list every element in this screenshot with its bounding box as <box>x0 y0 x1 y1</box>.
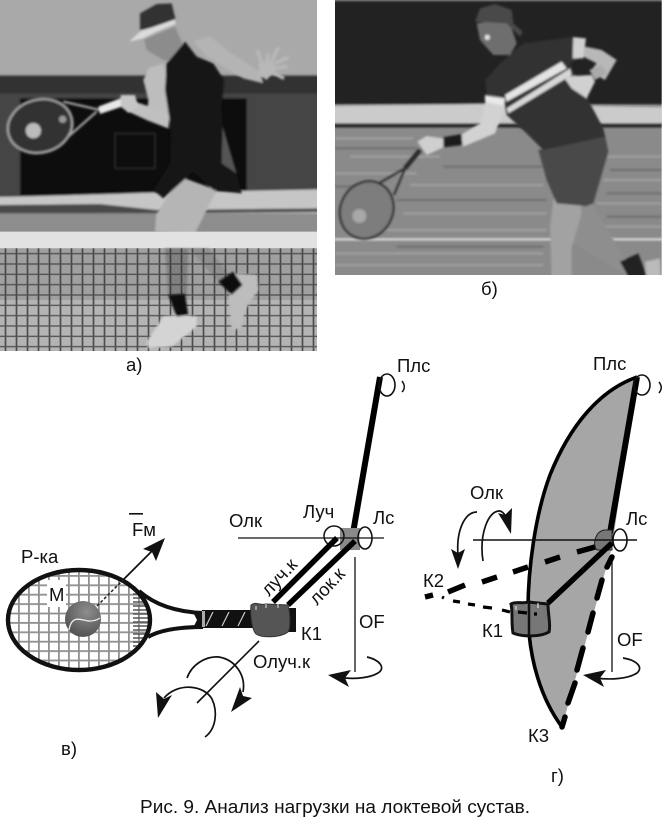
photo b: man playing low forehand <box>330 0 663 280</box>
label Fm <box>129 513 156 540</box>
photo a: woman playing forehand at net <box>0 0 317 351</box>
panel в: racket and arm diagram <box>8 355 430 759</box>
dashed path to K3 <box>562 557 612 727</box>
racket handle <box>202 610 254 628</box>
shoulder joint <box>379 374 404 396</box>
elbow joint <box>595 529 627 551</box>
label K2: К2 <box>423 570 444 591</box>
label Olk: Олк <box>229 510 263 531</box>
label г): г) <box>551 765 564 786</box>
label Luch: Луч <box>303 501 334 522</box>
label M <box>47 580 66 607</box>
label Oluch.k: Олуч.к <box>253 651 311 672</box>
label M: М <box>49 584 64 605</box>
axis Oluch.k with rotation arrows <box>156 641 259 737</box>
rotation arrow right <box>482 508 512 561</box>
label lok.k: лок.к <box>305 563 350 609</box>
axis OF with rotation arrow <box>583 557 640 687</box>
swing plane shape <box>528 377 637 727</box>
dotted racket line <box>442 597 537 614</box>
panel г: swing plane diagram <box>423 353 661 786</box>
racket b <box>330 150 420 248</box>
label Plc: Плс <box>397 355 430 376</box>
racket head <box>8 570 152 670</box>
dash-dot end of K2 <box>425 595 433 597</box>
label Lc: Лс <box>626 508 647 529</box>
upper arm <box>353 377 380 533</box>
caption: Рис. 9. Анализ нагрузки на локтевой сустав. <box>140 797 530 817</box>
label a): а) <box>126 354 142 375</box>
tennis ball M <box>65 601 101 637</box>
upper arm <box>610 377 637 533</box>
radius bone <box>273 538 337 602</box>
ulna bone <box>288 541 355 605</box>
label б): б) <box>481 278 498 299</box>
rotation arrow left <box>451 512 477 569</box>
axis Olk line <box>473 539 637 541</box>
player a feet <box>147 272 258 348</box>
axis Olk line <box>238 537 384 539</box>
dashed forearm to K2 <box>448 547 595 592</box>
label в): в) <box>61 738 77 759</box>
label luch.k: луч.к <box>257 553 302 600</box>
label K1: К1 <box>301 623 322 644</box>
forearm <box>548 543 612 603</box>
hand K1 <box>511 600 550 637</box>
hand K1 <box>251 603 296 637</box>
elbow joint <box>324 526 372 550</box>
label Plc: Плс <box>593 353 626 374</box>
racket throat <box>139 591 203 637</box>
label K1: К1 <box>482 620 503 641</box>
label racket: Р-ка <box>21 546 59 567</box>
label K3: К3 <box>528 725 549 746</box>
label Lc: Лс <box>373 507 394 528</box>
shoulder joint <box>634 375 661 395</box>
swing plane edge <box>528 377 637 727</box>
axis OF with rotation arrow <box>328 557 382 687</box>
label OF: OF <box>617 629 643 650</box>
racket a <box>2 92 138 160</box>
player b body <box>417 4 661 280</box>
label OF: OF <box>359 611 385 632</box>
player a body <box>125 3 288 233</box>
label Olk: Олк <box>470 482 504 503</box>
court net a <box>0 232 317 248</box>
force arrow Fm <box>97 538 165 606</box>
label Fm: Fм <box>132 519 156 540</box>
